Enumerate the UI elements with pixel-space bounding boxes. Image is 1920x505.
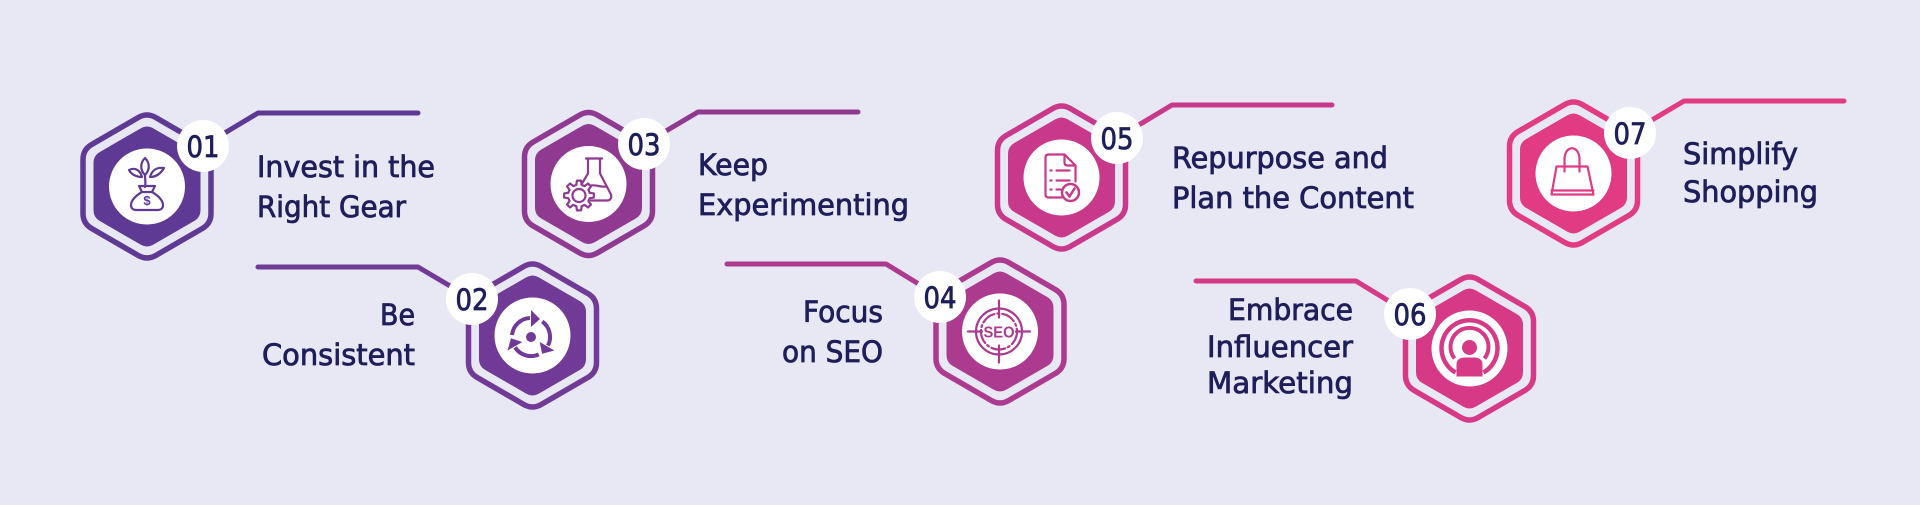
icon: seo target xyxy=(968,300,1030,362)
icon: shopping bag xyxy=(1552,148,1594,194)
label 04 xyxy=(782,295,883,369)
label 07: Shopping xyxy=(1683,175,1818,209)
label 07 xyxy=(1683,137,1818,209)
icon: cycle arrows xyxy=(503,310,564,367)
step 05: repurpose and plan the content xyxy=(998,105,1414,249)
badge 05: 05 xyxy=(1100,122,1134,156)
connector line 05 xyxy=(1117,105,1332,138)
step 04: focus on seo xyxy=(727,260,1064,403)
badge 03 xyxy=(618,118,670,170)
hexagon 02 xyxy=(468,264,596,407)
label 03: Experimenting xyxy=(698,188,909,222)
label 06: Influencer xyxy=(1207,330,1353,364)
hexagon 05 xyxy=(998,106,1126,249)
hexagon 07 xyxy=(1510,102,1638,245)
connector line 03 xyxy=(644,112,858,144)
label 05: Plan the Content xyxy=(1172,181,1414,215)
icon: checklist document xyxy=(1046,154,1079,201)
connector line 04 xyxy=(727,264,940,297)
badge 07: 07 xyxy=(1614,117,1646,151)
badge 04: 04 xyxy=(924,281,956,315)
label 04: on SEO xyxy=(782,335,883,369)
step 07: simplify shopping xyxy=(1510,101,1844,245)
label 06 xyxy=(1207,293,1353,400)
label 06: Marketing xyxy=(1207,366,1353,400)
badge 02: 02 xyxy=(456,283,488,317)
label 01 xyxy=(257,150,435,224)
hexagon 01 xyxy=(83,115,211,258)
badge 06: 06 xyxy=(1394,298,1426,332)
badge 01 xyxy=(177,120,229,172)
badge 01: 01 xyxy=(186,130,220,164)
label 05: Repurpose and xyxy=(1172,141,1388,175)
connector line 07 xyxy=(1630,101,1844,133)
badge 07 xyxy=(1604,107,1656,159)
label 01: Invest in the xyxy=(257,150,435,184)
label 02 xyxy=(262,298,415,372)
badge 06 xyxy=(1384,288,1436,340)
icon: influencer broadcast xyxy=(1442,320,1498,376)
label 02: Consistent xyxy=(262,338,415,372)
icon: flask and gear xyxy=(564,158,611,210)
label 05 xyxy=(1172,141,1414,215)
label 03 xyxy=(698,148,909,222)
hexagon 03 xyxy=(524,112,652,256)
hexagon 06 xyxy=(1406,277,1534,420)
icon: money bag plant xyxy=(129,158,164,210)
badge 04 xyxy=(914,271,966,323)
step 06: embrace influencer marketing xyxy=(1196,277,1534,420)
step 01: invest in the right gear xyxy=(83,113,435,258)
label 07: Simplify xyxy=(1683,137,1798,171)
step 03: keep experimenting xyxy=(524,112,909,256)
label 02: Be xyxy=(380,298,415,332)
label 03: Keep xyxy=(698,148,768,182)
hexagon 04 xyxy=(936,260,1064,403)
label 06: Embrace xyxy=(1228,293,1353,327)
connector line 02 xyxy=(258,267,472,299)
badge 05 xyxy=(1091,112,1143,164)
connector line 01 xyxy=(203,113,418,146)
step 02: be consistent xyxy=(258,264,596,407)
icon: seo target: SEO xyxy=(984,324,1014,342)
label 01: Right Gear xyxy=(257,190,406,224)
icon: money bag plant: $ xyxy=(143,193,151,208)
badge 03: 03 xyxy=(628,128,660,162)
connector line 06 xyxy=(1196,281,1410,314)
label 04: Focus xyxy=(803,295,883,329)
badge 02 xyxy=(446,273,498,325)
